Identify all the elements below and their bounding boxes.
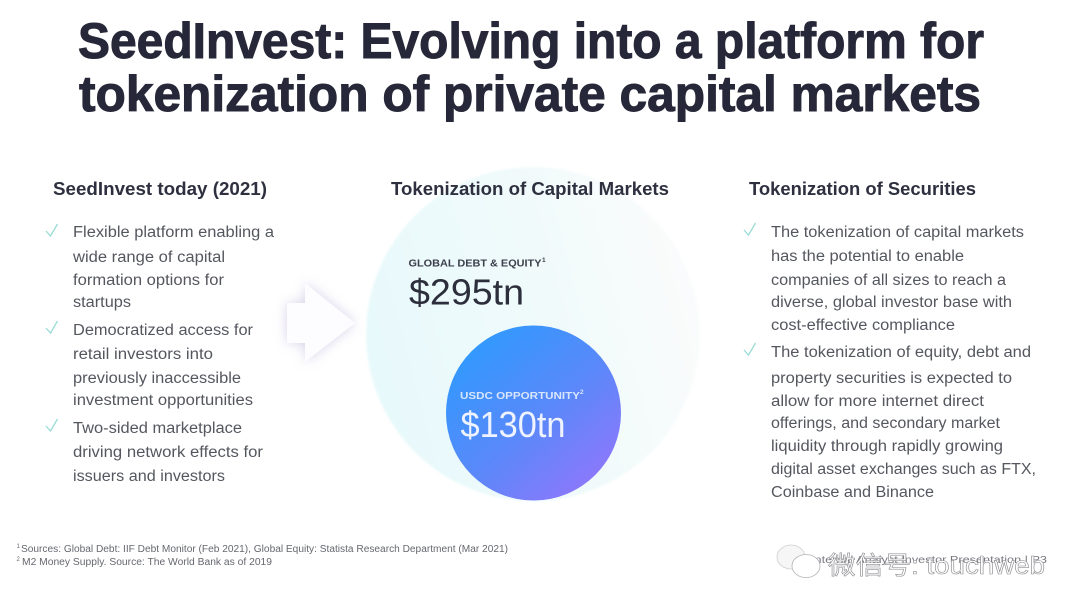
bullet: democratized access: retail investors into (73, 346, 213, 363)
value: 295tn: $295tn (409, 272, 524, 312)
panel: SeedInvest today (46, 178, 274, 485)
footnote mark 2: 2 (580, 389, 584, 396)
heading: SeedInvest today: SeedInvest today (2021) (53, 178, 267, 199)
label: global debt and equity: GLOBAL DEBT & EQUITY (408, 258, 542, 270)
bullet: equity debt property: offerings, and secondary market (771, 415, 1001, 432)
footnotes: 1 (16, 544, 20, 550)
bullet: flexible platform: Flexible platform enabling a (73, 224, 274, 241)
footnotes (16, 544, 508, 568)
panel: tokenization of capital markets (366, 167, 700, 501)
page footer: Internal Analyst Investor Presentation | P3 (811, 554, 1047, 566)
bullet: equity debt property: digital asset exchanges such as FTX, (771, 461, 1036, 478)
label: USDC opportunity: USDC OPPORTUNITY (460, 390, 580, 402)
bullet: two-sided marketplace: driving network effects for (73, 444, 263, 461)
bullet: democratized access: previously inaccessible (73, 370, 241, 387)
panel: tokenization of securities (744, 178, 1036, 501)
arrow (287, 283, 355, 362)
bullet: equity debt property: Coinbase and Binance (771, 484, 934, 501)
bullet: two-sided marketplace: issuers and investors (73, 468, 225, 485)
bullet: capital markets potential: cost-effective compliance (771, 317, 955, 334)
bullet: equity debt property (744, 343, 1036, 501)
bullet: democratized access: investment opportunities (73, 392, 253, 409)
large circle (366, 167, 700, 501)
bullet: equity debt property: The tokenization of equity, debt and (771, 344, 1031, 361)
bullet: two-sided marketplace: Two-sided marketplace (73, 420, 242, 437)
bullet: flexible platform: formation options for (73, 272, 224, 289)
bullet: capital markets potential (744, 223, 1024, 334)
value: 130tn: $130tn (460, 404, 566, 445)
bullet: equity debt property: allow for more internet direct (771, 393, 985, 410)
bullet: capital markets potential: The tokenization of capital markets (771, 224, 1024, 241)
bullet: two-sided marketplace (46, 419, 263, 485)
title (78, 13, 984, 122)
bullet: capital markets potential: companies of all sizes to reach a (771, 272, 1006, 289)
title: SeedInvest: Evolving into a platform for (78, 13, 984, 69)
bullet: democratized access: Democratized access for (73, 322, 253, 339)
bullet: flexible platform: startups (73, 294, 131, 311)
bullet: flexible platform (46, 224, 274, 311)
bullet: capital markets potential: has the potential to enable (771, 248, 964, 265)
footnotes: M2 Money Supply. Source: The World Bank as of 2019 (22, 557, 272, 568)
footnote mark 1: 1 (542, 257, 546, 264)
footnotes: 2 (16, 557, 20, 563)
small circle (446, 326, 621, 500)
bullet: equity debt property: liquidity through rapidly growing (771, 438, 1003, 455)
text: watermark: 微信号: touchweb (828, 552, 1045, 580)
watermark (777, 545, 1045, 580)
bullet: equity debt property: property securities is expected to (771, 370, 1012, 387)
footnotes: Sources: Global Debt: IIF Debt Monitor (Feb 2021), Global Equity: Statista Research Department (Mar 2021) (21, 544, 508, 555)
title: tokenization of private capital markets (79, 66, 981, 122)
bullet: flexible platform: wide range of capital (72, 249, 225, 266)
heading: securities: Tokenization of Securities (749, 178, 976, 199)
bullet: democratized access (46, 321, 253, 409)
heading: capital markets: Tokenization of Capital Markets (391, 178, 669, 199)
icon: chat bubbles (777, 545, 820, 578)
bullet: capital markets potential: diverse, global investor base with (771, 294, 1012, 311)
